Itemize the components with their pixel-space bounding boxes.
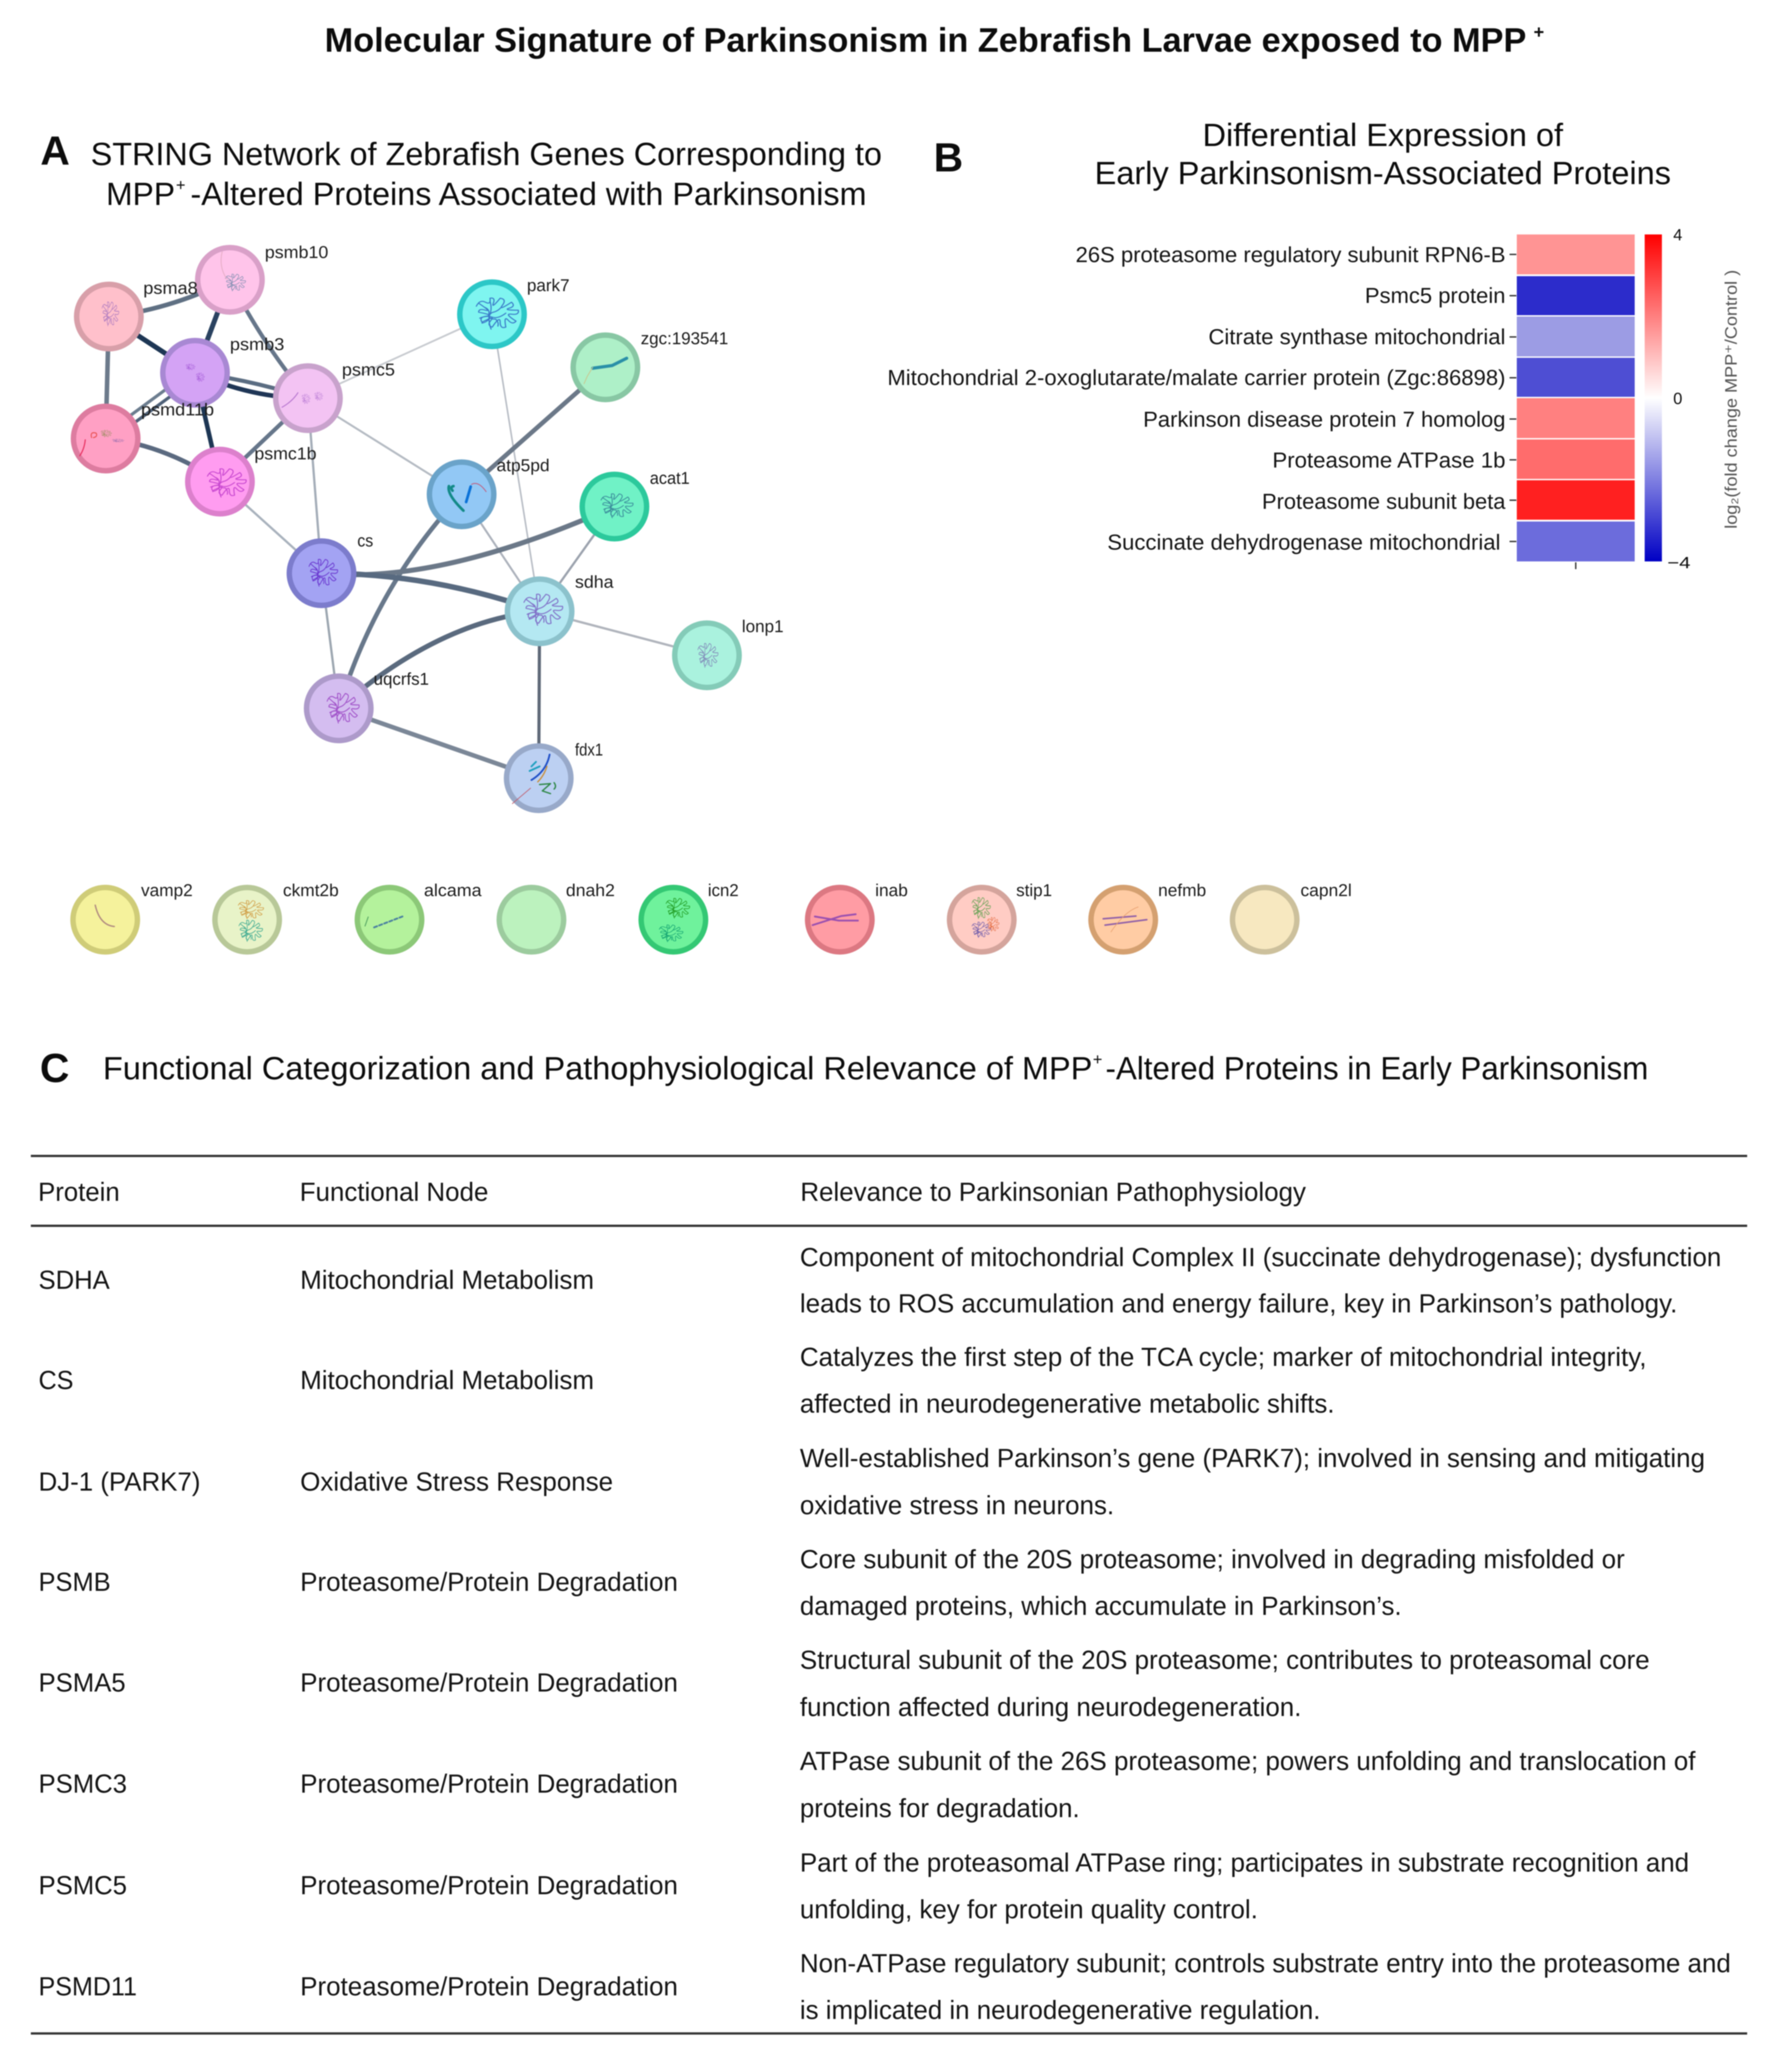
row: CS: CS — [39, 1365, 73, 1395]
table rules — [31, 1156, 1747, 2033]
panel A: STRING network — [40, 128, 1352, 952]
node: alcama: alcama — [424, 881, 482, 900]
heatmap row labels: Mitochondrial 2-oxoglutarate/malate carrier protein (Zgc:86898) — [887, 366, 1505, 390]
table header: Functional Node — [300, 1177, 488, 1207]
row: CS — [39, 1342, 1646, 1419]
node: zgc:193541: zgc:193541 — [641, 329, 728, 348]
row: PSMC3: Proteasome/Protein Degradation — [300, 1769, 678, 1799]
row: PSMD11: Non-ATPase regulatory subunit; controls substrate entry into the proteasome and — [800, 1949, 1731, 1978]
row: PSMA5: function affected during neurodegeneration. — [800, 1692, 1301, 1722]
title: Molecular Signature of Parkinsonism in Zebrafish Larvae exposed to MPP — [325, 21, 1526, 59]
row: SDHA — [39, 1243, 1721, 1318]
heatmap row labels: Proteasome subunit beta — [1262, 490, 1505, 514]
network edges — [103, 280, 707, 778]
colour bar legend: −4 — [1667, 553, 1690, 572]
node: stip1: stip1 — [1016, 881, 1052, 900]
heading: panel A — [91, 137, 882, 212]
node: stip1 — [950, 881, 1052, 952]
colour bar legend: 0 — [1673, 389, 1682, 408]
node: fdx1 — [507, 741, 603, 810]
row: PSMB: Proteasome/Protein Degradation — [300, 1567, 678, 1597]
node: alcama — [357, 881, 482, 952]
panel letter B: B — [934, 135, 963, 180]
node: uqcrfs1: uqcrfs1 — [374, 670, 429, 689]
node: capn2l: capn2l — [1301, 881, 1352, 900]
row: SDHA: Mitochondrial Metabolism — [300, 1265, 594, 1295]
node: sdha: sdha — [575, 573, 614, 592]
heatmap row labels — [887, 243, 1505, 555]
row: DJ-1 (PARK7): oxidative stress in neurons. — [800, 1491, 1114, 1520]
node: dnah2 — [499, 881, 615, 952]
row: PSMC5: unfolding, key for protein quality control. — [800, 1895, 1258, 1924]
node: psmc1b: psmc1b — [254, 444, 317, 463]
row: PSMC3: ATPase subunit of the 26S proteasome; powers unfolding and translocation of — [800, 1746, 1696, 1776]
node: icn2 — [641, 881, 739, 952]
row: PSMA5: PSMA5 — [39, 1668, 126, 1697]
row: PSMA5: Structural subunit of the 20S proteasome; contributes to proteasomal core — [800, 1645, 1650, 1675]
node: psma8 — [77, 279, 198, 349]
heatmap row labels: Psmc5 protein — [1365, 284, 1505, 308]
heatmap row labels: Proteasome ATPase 1b — [1272, 449, 1505, 473]
row: PSMC3: proteins for degradation. — [800, 1794, 1080, 1823]
row: DJ-1 (PARK7): Oxidative Stress Response — [300, 1467, 613, 1497]
heatmap row labels: 26S proteasome regulatory subunit RPN6-B — [1076, 243, 1505, 267]
row: PSMB — [39, 1545, 1625, 1621]
heading: panel A: MPP — [106, 176, 175, 212]
table header — [38, 1177, 1306, 1207]
heading: panel B: Early Parkinsonism-Associated Proteins — [1095, 156, 1671, 191]
panel C: functional categorization table — [31, 1046, 1747, 2033]
panel letter A: A — [40, 128, 70, 174]
node: acat1: acat1 — [650, 469, 690, 488]
node: ckmt2b: ckmt2b — [283, 881, 339, 900]
node: dnah2: dnah2 — [566, 881, 615, 900]
row: CS: Mitochondrial Metabolism — [300, 1365, 594, 1395]
row: DJ-1 (PARK7): Well-established Parkinson’s gene (PARK7); involved in sensing and mitigating — [800, 1443, 1705, 1473]
row: PSMD11 — [39, 1949, 1731, 2025]
panel letter C: C — [40, 1046, 69, 1091]
node: icn2: icn2 — [708, 881, 739, 900]
node: psmd11b: psmd11b — [141, 400, 214, 419]
node: lonp1: lonp1 — [742, 617, 784, 636]
node: park7 — [460, 276, 570, 346]
heatmap row labels: Succinate dehydrogenase mitochondrial — [1107, 531, 1500, 555]
node: psmb3: psmb3 — [230, 335, 284, 354]
node: psmc5: psmc5 — [342, 361, 395, 380]
heading: panel B: Differential Expression of — [1203, 117, 1563, 153]
colour bar axis label: log₂(fold change MPP⁺/Control ) — [1722, 270, 1740, 529]
row: CS: Catalyzes the first step of the TCA cycle; marker of mitochondrial integrity, — [800, 1342, 1646, 1372]
node: psmb10: psmb10 — [265, 243, 328, 262]
heatmap cells — [1517, 234, 1635, 561]
row: SDHA: Component of mitochondrial Complex II (succinate dehydrogenase); dysfunction — [800, 1243, 1721, 1272]
row: PSMC3: PSMC3 — [39, 1769, 127, 1799]
panel B: differential expression heatmap — [887, 117, 1740, 572]
row: SDHA: SDHA — [39, 1265, 110, 1295]
heading: panel A: + — [176, 176, 185, 194]
title: + — [1534, 22, 1544, 42]
row: PSMA5 — [39, 1645, 1650, 1722]
heading: panel A: STRING Network of Zebrafish Genes Corresponding to — [91, 137, 882, 172]
row: PSMA5: Proteasome/Protein Degradation — [300, 1668, 678, 1697]
heatmap row labels: Citrate synthase mitochondrial — [1208, 325, 1505, 349]
colour bar legend — [1645, 225, 1690, 572]
heading: panel A: -Altered Proteins Associated with Parkinsonism — [190, 176, 867, 212]
row: PSMC5 — [39, 1848, 1689, 1924]
node: inab: inab — [875, 881, 908, 900]
row: PSMC5: Part of the proteasomal ATPase ring; participates in substrate recognition and — [800, 1848, 1689, 1877]
node: capn2l — [1232, 881, 1352, 952]
row: PSMC5: Proteasome/Protein Degradation — [300, 1871, 678, 1900]
row: SDHA: leads to ROS accumulation and energy failure, key in Parkinson’s pathology. — [800, 1289, 1677, 1318]
table header: Relevance to Parkinsonian Pathophysiology — [800, 1177, 1306, 1207]
heatmap ticks — [1510, 254, 1576, 569]
node: park7: park7 — [527, 276, 570, 295]
node: ckmt2b — [215, 881, 339, 952]
heading: panel C — [103, 1050, 1648, 1087]
node: lonp1 — [675, 617, 784, 687]
row: PSMD11: PSMD11 — [39, 1972, 137, 2001]
row: PSMB: damaged proteins, which accumulate in Parkinson’s. — [800, 1591, 1402, 1621]
row: DJ-1 (PARK7): DJ-1 (PARK7) — [39, 1467, 200, 1497]
node: vamp2 — [73, 881, 193, 952]
row: PSMC3 — [39, 1746, 1696, 1823]
heading: panel B — [1095, 117, 1671, 191]
node: psma8: psma8 — [143, 279, 198, 298]
node: sdha — [507, 573, 614, 644]
table header: Protein — [38, 1177, 120, 1207]
node: nefmb: nefmb — [1158, 881, 1206, 900]
row: DJ-1 (PARK7) — [39, 1443, 1705, 1520]
node: cs — [289, 531, 373, 605]
row: PSMB: PSMB — [39, 1567, 111, 1597]
node: acat1 — [582, 469, 690, 539]
row: CS: affected in neurodegenerative metabolic shifts. — [800, 1389, 1335, 1419]
row: PSMD11: Proteasome/Protein Degradation — [300, 1972, 678, 2001]
node: psmd11b — [73, 400, 214, 471]
heading: panel C: Functional Categorization and Pathophysiological Relevance of MPP — [103, 1051, 1092, 1087]
heading: panel C: -Altered Proteins in Early Parkinsonism — [1106, 1051, 1648, 1087]
node: atp5pd: atp5pd — [497, 456, 550, 475]
heading: panel C: + — [1093, 1050, 1102, 1068]
node: uqcrfs1 — [307, 670, 429, 741]
node: psmc1b — [188, 444, 317, 514]
row: PSMD11: is implicated in neurodegenerative regulation. — [800, 1995, 1320, 2025]
node: atp5pd — [429, 456, 550, 527]
node: inab — [808, 881, 908, 952]
node: vamp2: vamp2 — [141, 881, 193, 900]
node: psmc5 — [276, 361, 395, 430]
heatmap row labels: Parkinson disease protein 7 homolog — [1143, 408, 1505, 432]
node: psmb10 — [198, 243, 328, 312]
row: PSMC5: PSMC5 — [39, 1871, 127, 1900]
row: PSMB: Core subunit of the 20S proteasome; involved in degrading misfolded or — [800, 1545, 1625, 1574]
node: fdx1: fdx1 — [575, 741, 603, 760]
node: psmb3 — [163, 335, 284, 405]
colour bar legend: 4 — [1673, 225, 1682, 244]
node: zgc:193541 — [573, 329, 728, 400]
node: nefmb — [1091, 881, 1206, 952]
node: cs: cs — [357, 531, 373, 551]
